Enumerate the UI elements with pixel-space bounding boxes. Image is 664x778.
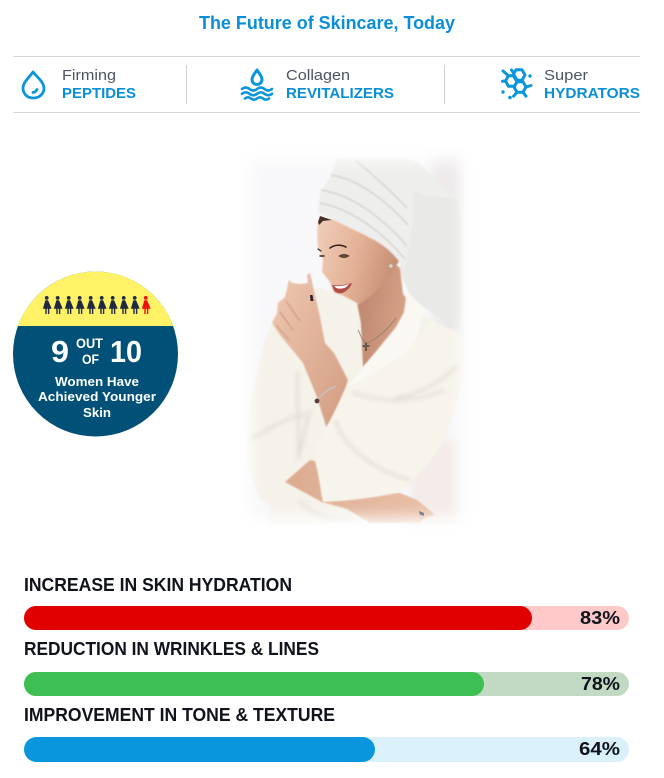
sleeve folds [335, 366, 457, 480]
chart: reduction in wrinkles and lines [24, 639, 629, 696]
turban [318, 162, 410, 262]
text: women have achieved younger skin: Women Have [55, 375, 139, 389]
icon: water drop and waves [242, 70, 272, 100]
smile [332, 283, 352, 293]
text: super hydrators [544, 67, 640, 102]
text: women have achieved younger skin [38, 375, 156, 420]
hair [318, 216, 332, 225]
panel: benefits strip [13, 56, 640, 113]
robe cuff and sleeve [317, 321, 467, 502]
chart: improvement in tone and texture: 64% [579, 739, 620, 759]
text: women have achieved younger skin: Skin [83, 406, 111, 420]
neck and chest [356, 264, 406, 367]
eyes and brow [318, 245, 349, 258]
text: 9 out of 10 [51, 334, 142, 369]
text: super hydrators: HYDRATORS [544, 85, 640, 102]
robe shading [254, 374, 320, 514]
finger lines [276, 301, 300, 340]
chart: reduction in wrinkles and lines: REDUCTION IN WRINKLES & LINES [24, 639, 319, 659]
panel: 9 out of 10 badge [13, 272, 178, 436]
icon row: ten women pictogram [43, 296, 151, 314]
text: collagen revitalizers: REVITALIZERS [286, 85, 394, 102]
text: women have achieved younger skin: Achieved Younger [38, 390, 156, 404]
chart: reduction in wrinkles and lines: 78% [581, 674, 620, 694]
raised hand and forearm [272, 273, 348, 429]
face [316, 219, 400, 306]
nails [310, 295, 314, 301]
text: firming peptides [62, 67, 136, 102]
chart: increase in skin hydration [24, 575, 629, 630]
chart: improvement in tone and texture: IMPROVEMENT IN TONE & TEXTURE [24, 705, 335, 725]
title: The Future of Skincare, Today [199, 13, 455, 33]
towel tail [400, 192, 434, 312]
icon: droplet [23, 72, 44, 98]
robe collar [350, 293, 420, 385]
icon: molecule [501, 70, 532, 99]
text: 9 out of 10: OUT [76, 335, 103, 351]
text: firming peptides: PEPTIDES [62, 85, 136, 102]
necklace [358, 318, 396, 344]
chart: improvement in tone and texture [24, 705, 629, 762]
robe body [250, 288, 431, 518]
text: 9 out of 10: 10 [110, 334, 142, 369]
text: firming peptides: Firming [62, 67, 116, 84]
lower forearm and hand [285, 460, 435, 523]
text: super hydrators: Super [544, 67, 588, 84]
chart: increase in skin hydration: 83% [580, 608, 620, 628]
text: collagen revitalizers: Collagen [286, 67, 350, 84]
text: 9 out of 10: 9 [51, 334, 69, 369]
earring [389, 264, 393, 268]
bracelet [317, 386, 336, 400]
text: collagen revitalizers [286, 67, 394, 102]
text: 9 out of 10: OF [82, 351, 99, 367]
photo: woman in towel and bathrobe [248, 158, 465, 524]
chart: increase in skin hydration: INCREASE IN SKIN HYDRATION [24, 575, 292, 595]
